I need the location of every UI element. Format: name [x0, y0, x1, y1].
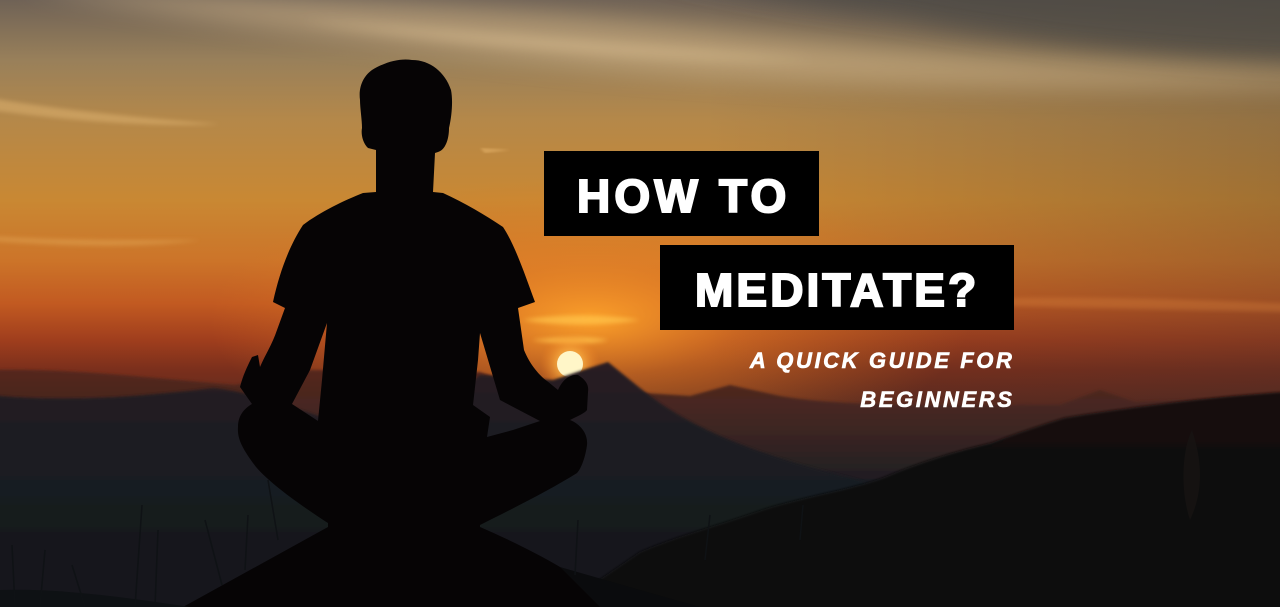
sun — [540, 334, 600, 394]
subtitle: A QUICK GUIDE FOR — [750, 348, 1014, 373]
title box: HOW TO — [544, 151, 819, 236]
person silhouette — [183, 59, 613, 607]
clouds — [0, 0, 1280, 344]
title box: HOW TO: HOW TO — [577, 170, 790, 222]
title box: MEDITATE?: MEDITATE? — [695, 264, 979, 316]
grass — [12, 480, 803, 607]
title box: MEDITATE? — [660, 245, 1014, 330]
distant mountains — [0, 362, 1280, 607]
foreground ground — [0, 567, 700, 607]
distant plant — [1183, 430, 1200, 520]
subtitle line two: BEGINNERS — [860, 387, 1014, 412]
